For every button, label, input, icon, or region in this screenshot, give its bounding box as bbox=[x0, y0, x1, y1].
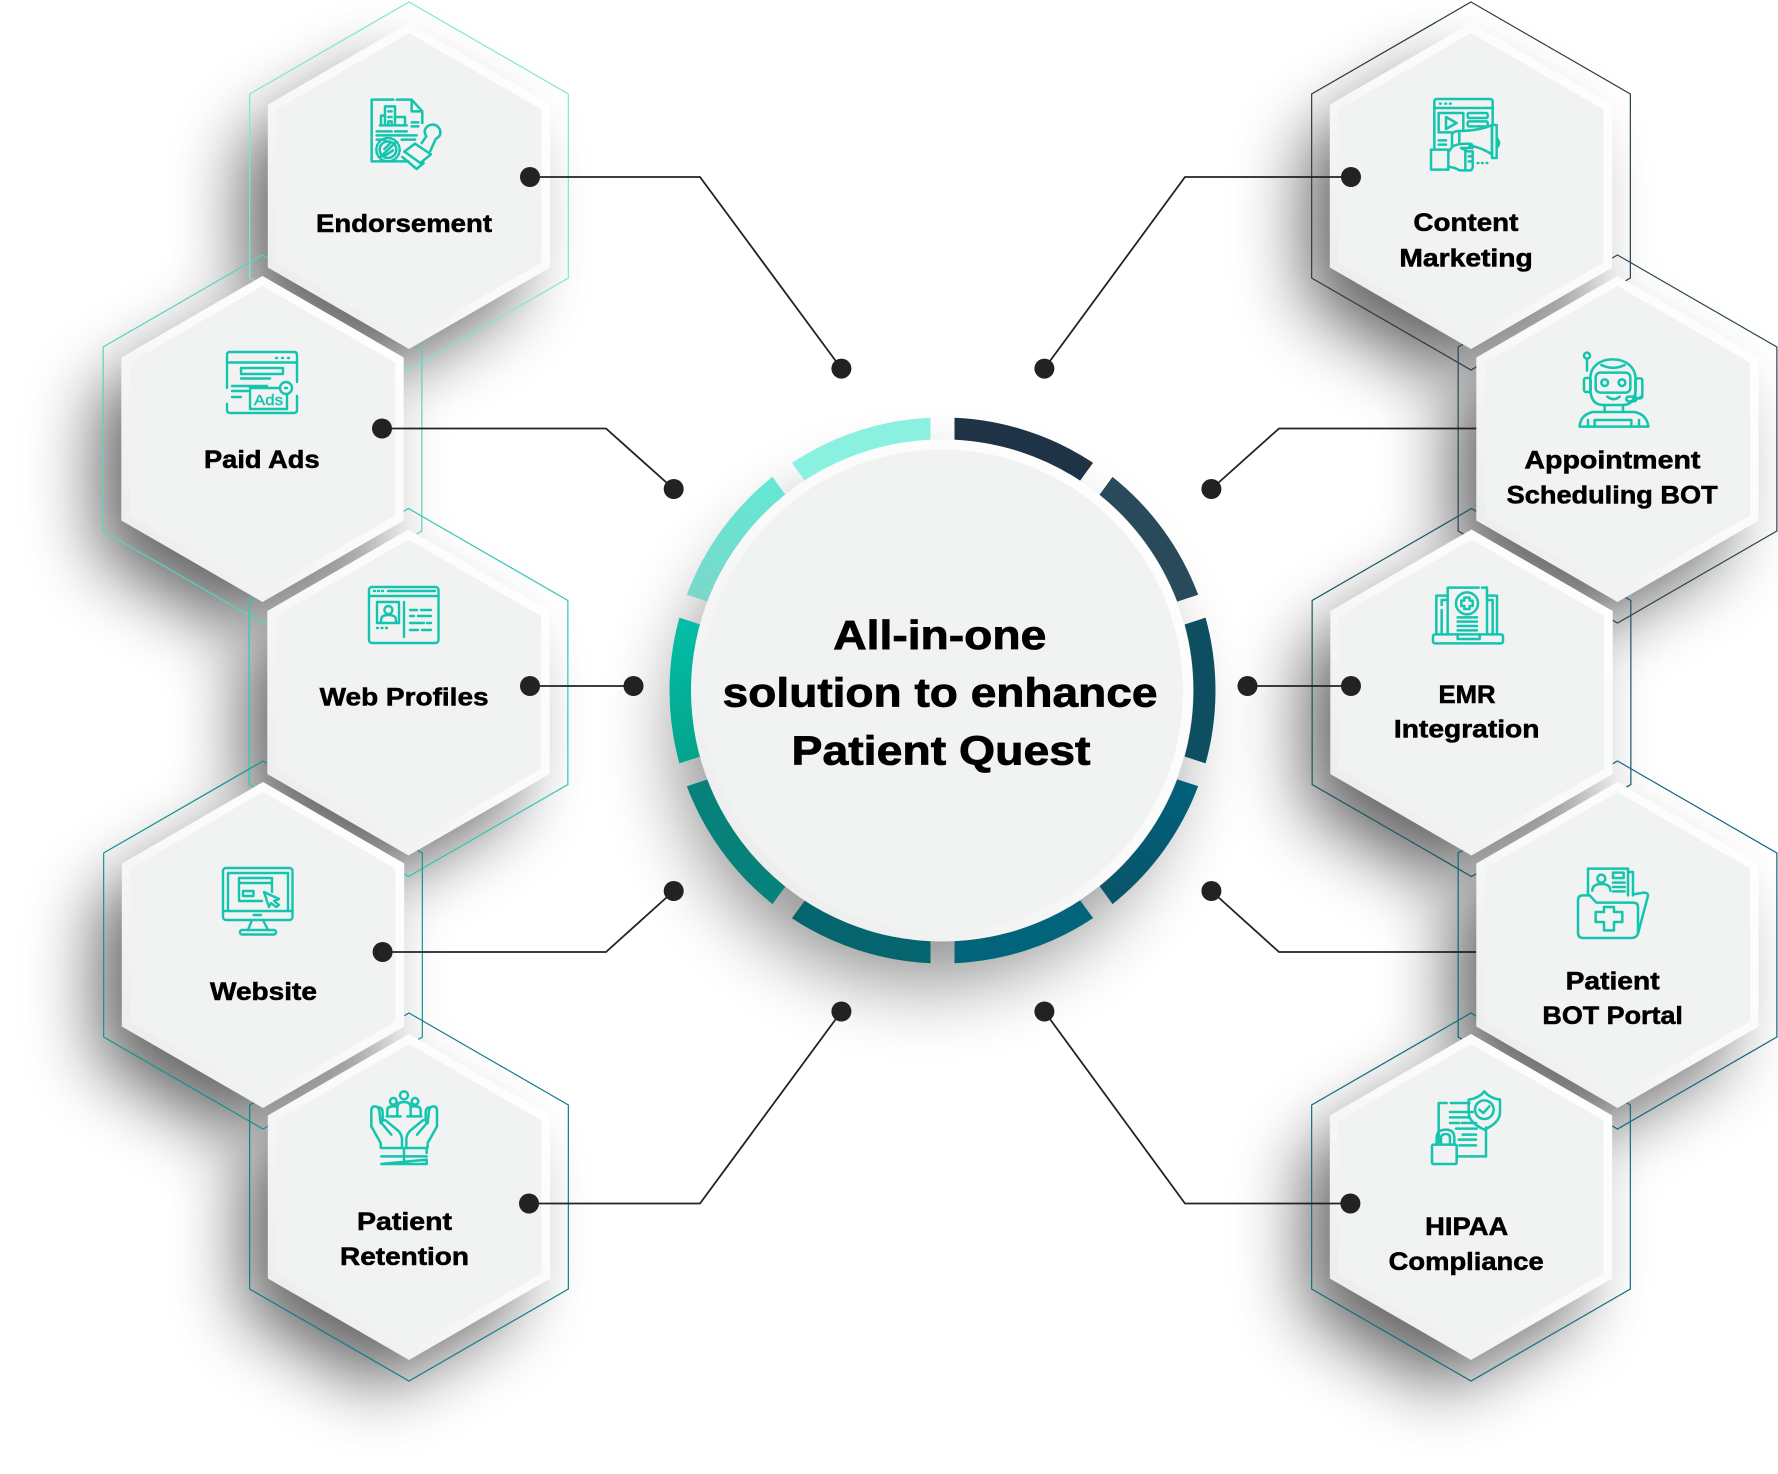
panel: EMR Integration bbox=[1330, 530, 1613, 856]
icon: monitor with cursor bbox=[223, 868, 292, 934]
label: Patient Retention: Retention bbox=[340, 1243, 469, 1271]
label: HIPAA Compliance bbox=[1389, 1213, 1544, 1276]
label: Content Marketing: Marketing bbox=[1399, 245, 1533, 273]
icon: ad window bbox=[227, 352, 297, 413]
connector: Website to centre bbox=[373, 881, 684, 962]
connector: Web Profiles to centre bbox=[520, 676, 644, 696]
panel: Appointment Scheduling BOT bbox=[1476, 276, 1759, 602]
panel: Paid Ads bbox=[121, 276, 404, 602]
panel: HIPAA Compliance bbox=[1330, 1034, 1612, 1360]
label: Patient Retention: Patient bbox=[357, 1208, 453, 1236]
panel: Endorsement bbox=[268, 23, 550, 349]
title: solution to enhance bbox=[723, 670, 1158, 716]
panel: Website bbox=[122, 782, 404, 1108]
label: Endorsement: Endorsement bbox=[316, 210, 493, 238]
label: Patient BOT Portal: Patient bbox=[1566, 968, 1660, 996]
label: HIPAA Compliance: Compliance bbox=[1389, 1248, 1544, 1276]
title bbox=[723, 612, 1158, 773]
icon: document with seal and stamp bbox=[372, 100, 440, 169]
connector: EMR Integration to centre bbox=[1238, 676, 1361, 696]
label: Patient BOT Portal: BOT Portal bbox=[1542, 1002, 1683, 1030]
connector: Endorsement to centre bbox=[520, 167, 851, 379]
panel: Web Profiles bbox=[267, 530, 550, 856]
label: EMR Integration bbox=[1394, 681, 1540, 744]
label: HIPAA Compliance: HIPAA bbox=[1425, 1213, 1508, 1241]
title: Patient Quest bbox=[792, 727, 1091, 773]
label: Appointment Scheduling BOT bbox=[1507, 447, 1718, 510]
label: Content Marketing bbox=[1399, 209, 1533, 273]
connector: Patient Retention to centre bbox=[519, 1002, 851, 1214]
connector: Paid Ads to centre bbox=[372, 418, 684, 499]
label: EMR Integration: Integration bbox=[1394, 716, 1540, 744]
label: Paid Ads: Paid Ads bbox=[204, 446, 320, 474]
central circle bbox=[691, 440, 1193, 942]
connector: Appointment Scheduling BOT to centre bbox=[1201, 428, 1480, 499]
panel: Patient BOT Portal bbox=[1476, 782, 1759, 1108]
icon text: Ads: Ads bbox=[254, 392, 283, 409]
label: Appointment Scheduling BOT: Appointment bbox=[1524, 447, 1701, 475]
label: Appointment Scheduling BOT: Scheduling BOT bbox=[1507, 482, 1718, 510]
icon: shield, document and padlock bbox=[1432, 1091, 1500, 1164]
segmented ring bbox=[637, 381, 1248, 1000]
icon: robot with headset bbox=[1580, 353, 1648, 427]
label: Patient Retention bbox=[340, 1208, 469, 1271]
title: All-in-one bbox=[833, 612, 1046, 658]
connector: Content Marketing to centre bbox=[1034, 167, 1361, 379]
label: Website: Website bbox=[210, 978, 317, 1006]
label: EMR Integration: EMR bbox=[1438, 681, 1496, 709]
label: Content Marketing: Content bbox=[1413, 209, 1519, 237]
label: Patient BOT Portal bbox=[1542, 968, 1683, 1030]
panel: Content Marketing bbox=[1330, 23, 1612, 349]
panel: Patient Retention bbox=[268, 1034, 550, 1360]
icon: web profile card bbox=[369, 587, 438, 643]
central circle shadow bbox=[676, 484, 1176, 984]
icon: hands holding people bbox=[371, 1091, 437, 1164]
connector: HIPAA Compliance to centre bbox=[1034, 1002, 1360, 1214]
connector: Patient BOT Portal to centre bbox=[1201, 881, 1480, 952]
label: Web Profiles: Web Profiles bbox=[320, 684, 489, 712]
icon: browser with megaphone bbox=[1431, 99, 1499, 170]
icon: laptop with medical record bbox=[1433, 588, 1503, 643]
icon: patient folder bbox=[1578, 869, 1648, 938]
